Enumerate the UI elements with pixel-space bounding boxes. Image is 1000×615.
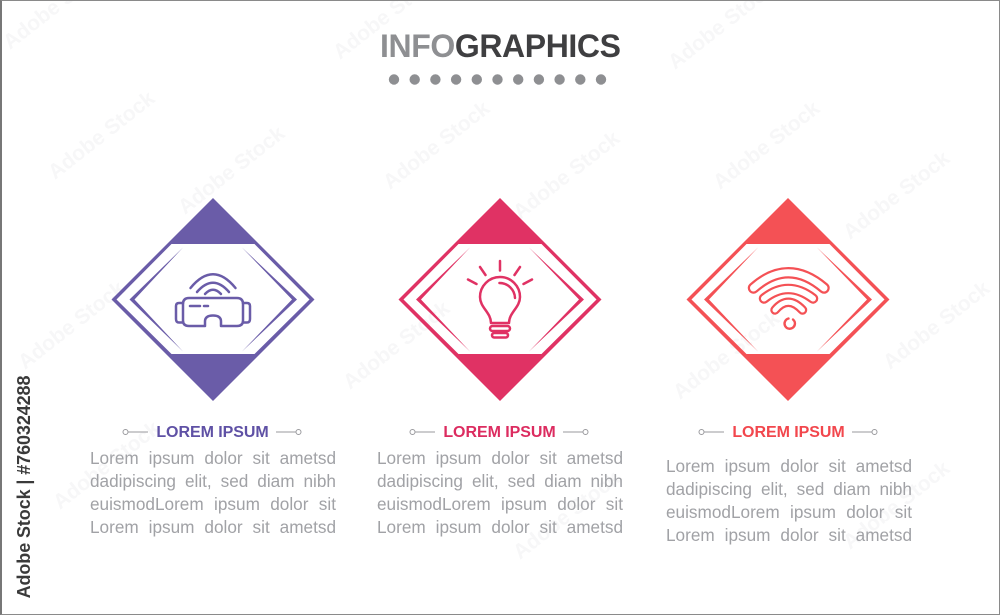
text block: purple: dadipiscing elit, sed diam nibh (90, 471, 336, 491)
title dots (389, 74, 606, 85)
text block: pink: Lorem ipsum dolor sit ametsd (377, 448, 623, 468)
text block: red: dadipiscing elit, sed diam nibh (666, 479, 912, 499)
text: Adobe Stock (14, 277, 129, 374)
diamond: red (686, 198, 890, 401)
label: red: LOREM IPSUM (732, 424, 845, 441)
connector: purple (123, 430, 301, 434)
text: Adobe Stock (709, 97, 824, 194)
connector: pink (410, 430, 588, 434)
diamond: purple (112, 198, 314, 401)
icon: VR headset (176, 274, 250, 326)
text: Adobe Stock (379, 97, 494, 194)
icon: light bulb (468, 261, 532, 338)
text block: pink (377, 448, 623, 537)
text: Adobe Stock (839, 147, 954, 244)
text block: purple: Lorem ipsum dolor sit ametsd (90, 517, 336, 537)
text block: pink: Lorem ipsum dolor sit ametsd (377, 517, 623, 537)
text block: pink: dadipiscing elit, sed diam nibh (377, 471, 623, 491)
text block: purple: euismodLorem ipsum dolor sit (90, 494, 336, 514)
text: Adobe Stock (509, 127, 624, 224)
text: Adobe Stock (339, 297, 454, 394)
text block: purple (90, 448, 336, 537)
text block: purple: Lorem ipsum dolor sit ametsd (90, 448, 336, 468)
icon: wifi (754, 273, 824, 329)
title: INFOGRAPHICS (380, 28, 621, 64)
connector: red (699, 430, 877, 434)
stock credit: Adobe Stock | #760324288 (14, 376, 34, 598)
text: Adobe Stock (669, 307, 784, 404)
text block: pink: euismodLorem ipsum dolor sit (377, 494, 623, 514)
text: Adobe Stock (839, 457, 954, 554)
text: Adobe Stock (174, 122, 289, 219)
text: Adobe Stock (879, 277, 994, 374)
text: Adobe Stock (44, 87, 159, 184)
text block: red: euismodLorem ipsum dolor sit (666, 502, 912, 522)
diamond: pink (398, 198, 602, 401)
text block: red: Lorem ipsum dolor sit ametsd (666, 525, 912, 545)
label: pink: LOREM IPSUM (443, 424, 556, 441)
text block: red (666, 456, 912, 545)
text: Adobe Stock (509, 467, 624, 564)
label: purple: LOREM IPSUM (156, 424, 269, 441)
text: Adobe Stock (49, 417, 164, 514)
text block: red: Lorem ipsum dolor sit ametsd (666, 456, 912, 476)
